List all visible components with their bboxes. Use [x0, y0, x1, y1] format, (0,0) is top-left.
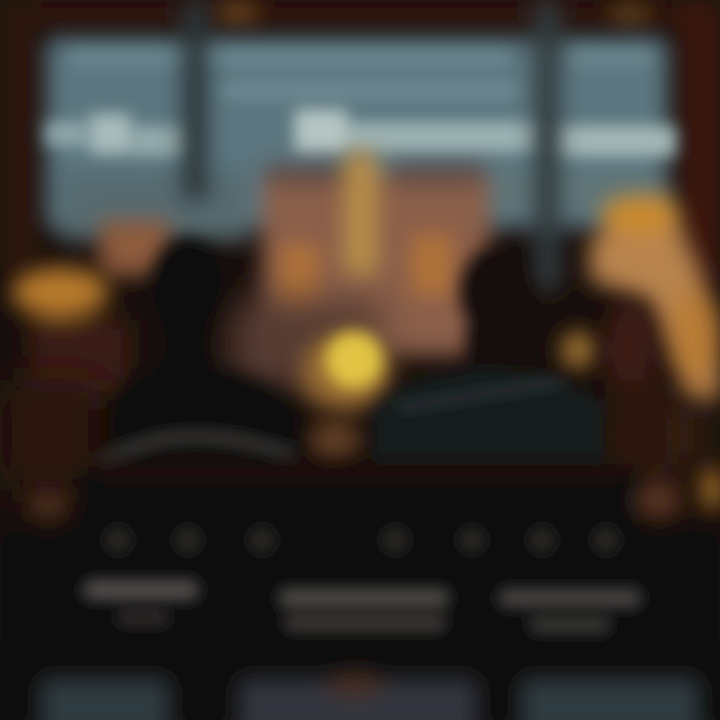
lower wall tones [0, 300, 700, 490]
right silhouette [372, 246, 605, 470]
left silhouette [110, 237, 300, 470]
bottom strip [40, 672, 700, 720]
window frame [0, 0, 720, 280]
blurred heading text bands [46, 50, 675, 156]
central yellow lamp [301, 332, 389, 462]
bottom side warm accents [26, 482, 682, 521]
centre caption blur [280, 590, 448, 630]
left caption blur [85, 582, 197, 624]
row of small blurred icons [106, 528, 618, 552]
right orange glow [562, 190, 720, 510]
bench [0, 462, 720, 720]
central building [100, 150, 490, 355]
right background figure [604, 300, 672, 470]
right caption blur [500, 590, 640, 632]
shoulder highlights [105, 382, 560, 462]
left lamp glow [12, 268, 130, 400]
window sky panel [46, 38, 668, 240]
window pillars [182, 0, 560, 290]
